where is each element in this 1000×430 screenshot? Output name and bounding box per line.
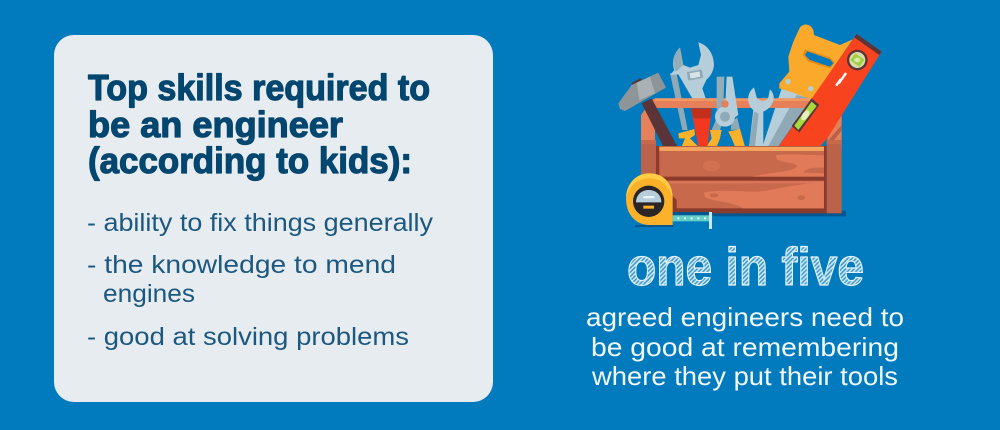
- box upper plank: [659, 147, 824, 177]
- box front: [656, 146, 827, 213]
- box left post: [641, 140, 656, 213]
- list of skills: - good at solving problems: [87, 323, 409, 351]
- list of skills: engines: [103, 280, 195, 308]
- icon: hammer: [618, 73, 677, 147]
- icon: hand saw handle: [779, 25, 853, 99]
- icon: tape measure: [626, 173, 713, 229]
- box back posts: [641, 98, 655, 150]
- heading: top skills: Top skills required to: [88, 67, 430, 108]
- heading: top skills: be an engineer: [88, 104, 343, 145]
- list of skills: - the knowledge to mend: [87, 251, 396, 279]
- text block: tools statement: [586, 302, 904, 391]
- icon: toolbox with tools: [618, 25, 882, 229]
- box right post: [827, 140, 842, 213]
- text block: tools statement: be good at remembering: [591, 332, 899, 362]
- icon: open-end spanner: [748, 87, 774, 147]
- text block: tools statement: agreed engineers need to: [586, 302, 904, 332]
- list of skills: - ability to fix things generally: [87, 209, 434, 237]
- icon: pliers: [707, 77, 745, 147]
- panel: top skills: [54, 35, 493, 402]
- box back rail: [655, 98, 810, 108]
- heading: top skills: (according to kids):: [88, 140, 412, 181]
- list of skills: [87, 209, 434, 351]
- icon: adjustable wrench: [670, 42, 714, 147]
- heading: top skills: [88, 67, 430, 181]
- box lower plank: [659, 181, 824, 208]
- box shadow: [713, 213, 846, 216]
- callout: one in five: one in five: [627, 238, 864, 297]
- text block: tools statement: where they put their tools: [591, 361, 898, 391]
- icon: hand saw blade: [763, 88, 812, 146]
- icon: spirit level: [778, 34, 882, 147]
